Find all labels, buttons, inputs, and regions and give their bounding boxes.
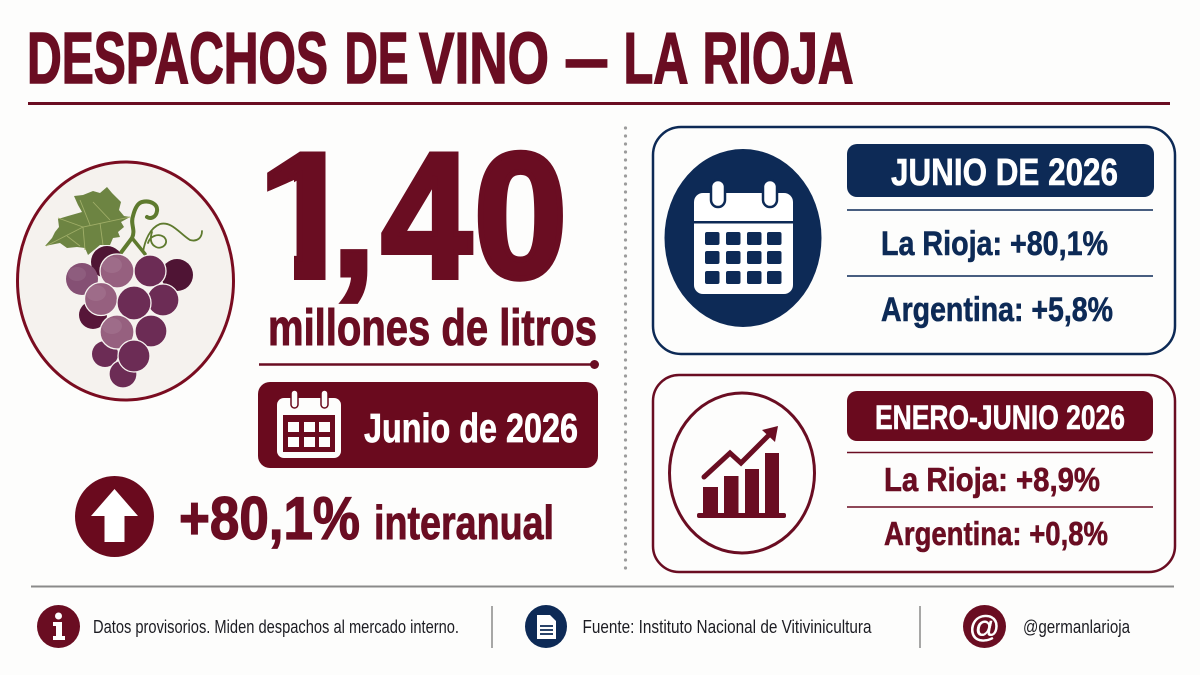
stat: argentina: Argentina: +5,8% [881, 291, 1113, 329]
stat: argentina: Argentina: +0,8% [884, 515, 1108, 552]
icon: vine stem and tendrils [120, 201, 202, 254]
date badge [258, 382, 598, 468]
panel heading [847, 144, 1154, 197]
icon: up arrow [75, 476, 154, 557]
big number: , [330, 123, 377, 313]
title: LA [624, 19, 688, 99]
icon: document [525, 605, 567, 648]
panel: enero-junio 2026 [653, 375, 1175, 572]
panel: junio de 2026 [653, 127, 1175, 354]
icon: info [37, 605, 80, 648]
icon: at sign [963, 605, 1006, 648]
footnote: source: Fuente: Instituto Nacional de Vitivinicultura [582, 617, 872, 637]
title: VINO [419, 19, 549, 99]
title: — [566, 19, 607, 99]
stat: la rioja: La Rioja: +8,9% [884, 461, 1100, 498]
divider with dot [259, 360, 599, 369]
panel heading [847, 391, 1153, 441]
icon: calendar [277, 390, 341, 458]
icon: grapes [66, 246, 193, 388]
badge text: Junio de 2026 [364, 405, 578, 451]
footnote: handle: @germanlarioja [1023, 617, 1131, 637]
panel heading: JUNIO DE 2026 [891, 152, 1118, 194]
title: DESPACHOS [27, 19, 328, 99]
big number: 4 [382, 116, 472, 315]
icon: at sign: @ [969, 609, 1000, 644]
icon: calendar [664, 149, 822, 327]
title [27, 19, 854, 99]
icon: growth chart [670, 393, 814, 553]
change value: +80,1% [179, 485, 360, 552]
footnote: data note: Datos provisorios. Miden despachos al mercado interno. [93, 617, 459, 637]
big number: 1 [258, 116, 357, 315]
title: RIOJA [702, 19, 854, 99]
title: DE [344, 19, 408, 99]
big number: 0 [474, 116, 567, 315]
icon: vine leaf [45, 187, 130, 255]
panel heading: ENERO-JUNIO 2026 [875, 399, 1125, 437]
icon: grape bunch medallion [18, 162, 234, 400]
change label: interanual [374, 496, 554, 549]
unit label: millones de litros [268, 299, 597, 356]
stat: la rioja: La Rioja: +80,1% [881, 225, 1108, 263]
big number [267, 150, 563, 304]
